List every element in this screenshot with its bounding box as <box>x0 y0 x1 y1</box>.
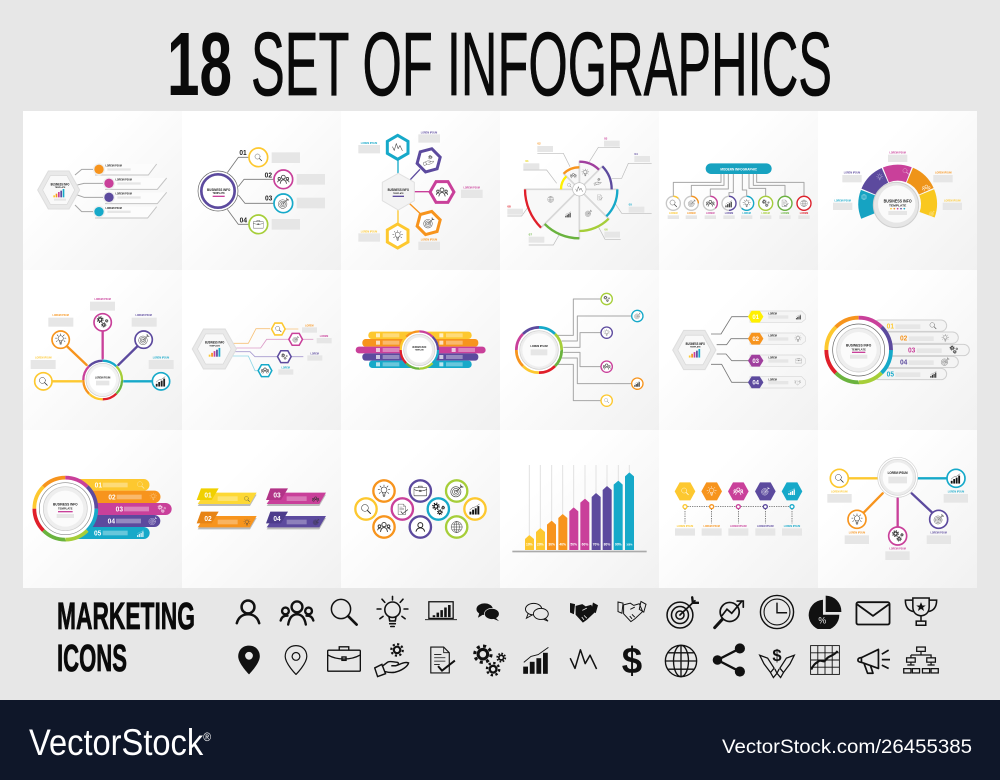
panel 5: modern infographic org chart: LOREM <box>761 213 770 215</box>
panel 5: modern infographic org chart: LOREM <box>669 213 678 215</box>
panel 4: fan chart with eight wedges: 04 <box>634 152 638 156</box>
title: 18 <box>167 15 232 115</box>
panel 10: ring with six branches <box>516 293 643 406</box>
panel 14: four slanted ribbons: 02 <box>204 514 212 523</box>
panel 7: hub with five spokes: LOREM IPSUM <box>52 315 69 317</box>
panel 12: large ring with five side pills: TEMPLATE <box>851 347 866 351</box>
panel 8: hexagon with circuit lines: BUSINESS INFO <box>205 341 224 345</box>
panel 11: hexagon with four numbered rows: LOREM <box>768 336 777 338</box>
panel 6: semicircle gauge: LOREM IPSUM <box>889 153 906 155</box>
panel 5: modern infographic org chart: LOREM <box>706 213 715 215</box>
panel 17: hexagon timeline <box>675 482 802 536</box>
row 1, left three panels <box>38 132 483 250</box>
panel 1: hexagon with four ribbons: LOREM IPSUM <box>115 194 132 196</box>
panel 5: modern infographic org chart: LOREM <box>725 213 733 215</box>
panel 14: four slanted ribbons: 03 <box>273 491 281 500</box>
row 2, right three panels <box>516 293 969 406</box>
panel 3: central hexagon with five outer hexagons: LOREM IPSUM <box>421 240 437 242</box>
panel 11: hexagon with four numbered rows <box>673 311 805 388</box>
panel 16: arrow bar chart: 30% <box>548 542 555 546</box>
panel 4: fan chart with eight wedges: 03 <box>604 137 608 141</box>
panel 4: fan chart with eight wedges: 08 <box>507 204 511 208</box>
panel 18: top hub with five nodes: LOREM IPSUM <box>849 533 865 535</box>
panel 18: top hub with five nodes: LOREM IPSUM <box>888 471 908 475</box>
panel 13: ring with five colored pills: 01 <box>95 481 102 490</box>
panel 1: hexagon with four ribbons: BUSINESS INFO <box>51 182 69 186</box>
panel 15: ten linked icon circles <box>355 480 486 538</box>
panel 7: hub with five spokes: LOREM IPSUM <box>94 299 111 301</box>
panel 3: central hexagon with five outer hexagons: TEMPLATE <box>393 192 404 195</box>
panel 18: top hub with five nodes <box>827 457 968 560</box>
panel 4: fan chart with eight wedges: 02 <box>537 142 541 146</box>
panel 11: hexagon with four numbered rows: 03 <box>752 358 759 365</box>
panel 8: hexagon with circuit lines: LOREM <box>281 367 290 369</box>
panel 12: large ring with five side pills: 01 <box>887 322 895 331</box>
panel 18: top hub with five nodes: LOREM IPSUM <box>948 491 964 493</box>
panel 2: ring with numbered circles: TEMPLATE <box>212 192 225 195</box>
panel 13: ring with five colored pills <box>33 476 172 541</box>
panel 16: arrow bar chart <box>512 465 647 552</box>
footer logo: ® <box>203 730 211 744</box>
panel 18: top hub with five nodes: LOREM IPSUM <box>889 549 906 551</box>
panel 14: four slanted ribbons: 01 <box>204 491 212 500</box>
row 3, left three panels <box>33 476 486 541</box>
panel 8: hexagon with circuit lines <box>192 323 332 377</box>
panel 3: central hexagon with five outer hexagons: LOREM IPSUM <box>463 188 480 190</box>
panel 11: hexagon with four numbered rows: TEMPLATE <box>690 346 701 349</box>
panel 3: central hexagon with five outer hexagons: LOREM IPSUM <box>361 231 377 233</box>
panel 12: large ring with five side pills: 02 <box>900 334 907 343</box>
panel 1: hexagon with four ribbons <box>38 163 167 218</box>
row 2, left three panels <box>31 299 486 401</box>
panel 17: hexagon timeline: LOREM IPSUM <box>730 526 747 528</box>
panel 8: hexagon with circuit lines: LOREM <box>310 353 319 355</box>
panel 13: ring with five colored pills: 02 <box>108 493 116 502</box>
panel 4: fan chart with eight wedges: 06 <box>604 228 608 232</box>
panel 6: semicircle gauge: TEMPLATE <box>889 204 906 208</box>
panel 6: semicircle gauge <box>833 153 962 228</box>
panel 10: ring with six branches: LOREM IPSUM <box>530 344 548 348</box>
panel backgrounds grid <box>23 111 977 588</box>
panel 9: ring with horizontal colored bands: TEMPLATE <box>415 349 425 352</box>
panel 11: hexagon with four numbered rows: LOREM <box>768 314 777 316</box>
panel 14: four slanted ribbons <box>197 488 326 529</box>
panel 16: arrow bar chart: 70% <box>593 542 599 546</box>
row 3, right three panels <box>512 457 968 560</box>
panel 6: semicircle gauge: LOREM IPSUM <box>844 173 860 175</box>
panel 1: hexagon with four ribbons: LOREM IPSUM <box>105 166 122 168</box>
panel 17: hexagon timeline: LOREM IPSUM <box>677 526 693 528</box>
heading: marketing icons <box>57 596 195 680</box>
heading: marketing icons: MARKETING <box>57 596 195 638</box>
panel 12: large ring with five side pills <box>826 318 969 382</box>
panel 11: hexagon with four numbered rows: LOREM <box>768 379 777 381</box>
icon strip: top row <box>237 595 937 630</box>
row 1, right three panels <box>507 137 962 245</box>
panel 5: modern infographic org chart: LOREM <box>800 213 808 215</box>
panel 1: hexagon with four ribbons: TEMPLATE <box>55 186 66 189</box>
panel 13: ring with five colored pills: TEMPLATE <box>58 506 73 510</box>
panel 4: fan chart with eight wedges: 07 <box>529 233 532 237</box>
panel 4: fan chart with eight wedges <box>507 137 652 245</box>
panel 13: ring with five colored pills: BUSINESS INFO <box>53 502 78 507</box>
panel 16: arrow bar chart: 100% <box>626 544 633 546</box>
panel 16: arrow bar chart: 20% <box>537 542 544 546</box>
footer logo: VectorStock <box>29 722 226 763</box>
footer bar <box>0 700 1000 780</box>
panel 16: arrow bar chart: 50% <box>570 542 577 546</box>
panel 16: arrow bar chart: 90% <box>615 542 622 546</box>
panel 3: central hexagon with five outer hexagons: BUSINESS INFO <box>388 188 409 192</box>
panel 3: central hexagon with five outer hexagons: LOREM IPSUM <box>361 143 377 145</box>
panel 8: hexagon with circuit lines: LOREM <box>320 336 328 338</box>
panel 5: modern infographic org chart: LOREM <box>742 213 751 215</box>
panel 6: semicircle gauge: LOREM IPSUM <box>834 200 851 202</box>
panel 12: large ring with five side pills: 03 <box>908 346 915 355</box>
panel 5: modern infographic org chart: LOREM <box>781 213 789 215</box>
panel 6: semicircle gauge: BUSINESS INFO <box>884 198 912 204</box>
panel 16: arrow bar chart: 80% <box>604 542 610 546</box>
panel 13: ring with five colored pills: 05 <box>94 529 101 538</box>
panel 13: ring with five colored pills: 04 <box>108 517 116 526</box>
panel 1: hexagon with four ribbons: LOREM IPSUM <box>115 180 132 182</box>
panel 7: hub with five spokes: LOREM IPSUM <box>95 376 111 380</box>
panel 9: ring with horizontal colored bands: BUSINESS INFO <box>412 345 426 349</box>
panel 13: ring with five colored pills: 03 <box>116 505 123 514</box>
panel 11: hexagon with four numbered rows: 01 <box>752 314 759 321</box>
panel 3: central hexagon with five outer hexagons: LOREM IPSUM <box>421 132 437 134</box>
panel 12: large ring with five side pills: BUSINESS INFO <box>846 343 871 348</box>
panel 18: top hub with five nodes: LOREM IPSUM <box>930 533 947 535</box>
panel 2: ring with numbered circles: 02 <box>265 170 272 179</box>
panel 4: fan chart with eight wedges: 05 <box>629 202 632 206</box>
heading: marketing icons: ICONS <box>57 638 127 680</box>
panel 12: large ring with five side pills: 05 <box>887 370 895 379</box>
panel 7: hub with five spokes: LOREM IPSUM <box>153 357 169 359</box>
panel 18: top hub with five nodes: LOREM IPSUM <box>831 491 848 493</box>
panel 3: central hexagon with five outer hexagons <box>358 132 483 250</box>
panel 16: arrow bar chart: 60% <box>582 542 588 546</box>
panel 5: modern infographic org chart <box>666 163 811 219</box>
panel 6: semicircle gauge: LOREM IPSUM <box>935 173 952 175</box>
panel 17: hexagon timeline: LOREM IPSUM <box>757 526 774 528</box>
panel 12: large ring with five side pills: 04 <box>900 358 908 367</box>
panel 8: hexagon with circuit lines: LOREM <box>305 325 314 327</box>
footer image id: VectorStock.com/26455385 <box>722 737 972 758</box>
icon strip: bottom row <box>238 640 938 681</box>
panel 11: hexagon with four numbered rows: 02 <box>752 336 759 343</box>
panel 5: modern infographic org chart: LOREM <box>687 213 696 215</box>
panel 17: hexagon timeline: LOREM IPSUM <box>784 526 800 528</box>
panel 7: hub with five spokes: LOREM IPSUM <box>135 315 152 317</box>
panel 2: ring with numbered circles: 04 <box>240 216 248 225</box>
panel 14: four slanted ribbons: 04 <box>273 514 281 523</box>
panel 2: ring with numbered circles <box>198 148 325 234</box>
panel 5: modern infographic org chart: MODERN INFOGRAPHIC <box>720 166 757 171</box>
panel 7: hub with five spokes <box>31 299 174 401</box>
panel 1: hexagon with four ribbons: LOREM IPSUM <box>105 208 122 210</box>
panel 7: hub with five spokes: LOREM IPSUM <box>35 357 52 359</box>
title <box>167 15 832 115</box>
panel 9: ring with horizontal colored bands <box>356 331 486 369</box>
panel 11: hexagon with four numbered rows: BUSINESS INFO <box>686 342 705 346</box>
panel 4: fan chart with eight wedges: 01 <box>525 159 529 163</box>
panel 2: ring with numbered circles: BUSINESS INFO <box>207 187 230 192</box>
panel 6: semicircle gauge: LOREM IPSUM <box>944 200 961 202</box>
panel 11: hexagon with four numbered rows: 04 <box>752 380 759 387</box>
panel 17: hexagon timeline: LOREM IPSUM <box>703 526 720 528</box>
panel 16: arrow bar chart: 10% <box>526 542 533 546</box>
panel 16: arrow bar chart: 40% <box>559 542 566 546</box>
panel 2: ring with numbered circles: 03 <box>265 194 272 203</box>
panel 8: hexagon with circuit lines: TEMPLATE <box>209 345 221 348</box>
panel 11: hexagon with four numbered rows: LOREM <box>768 358 777 360</box>
panel 2: ring with numbered circles: 01 <box>239 148 247 157</box>
